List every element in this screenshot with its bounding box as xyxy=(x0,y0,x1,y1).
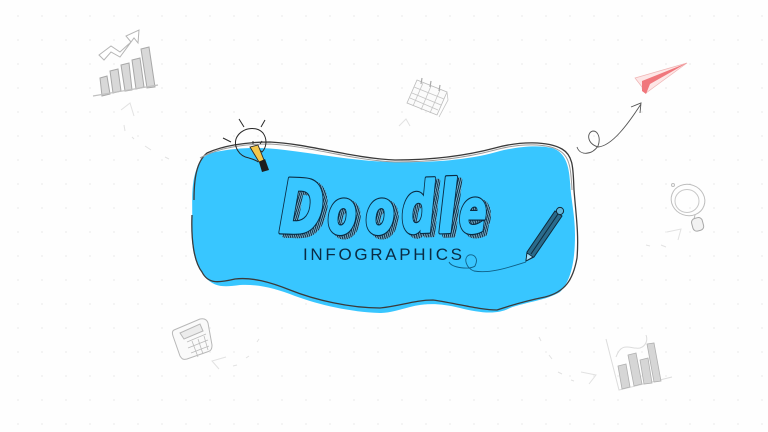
title: Doodle: e xyxy=(463,180,491,250)
subtitle: INFOGRAPHICS: INFOGRAPHICS xyxy=(303,245,462,264)
arrow: curly line to plane xyxy=(577,103,641,153)
icon: calendar xyxy=(407,78,448,117)
title: Doodle: l xyxy=(436,166,459,250)
title: Doodle: o xyxy=(366,179,394,248)
icon: calculator xyxy=(172,319,212,359)
icon: axis bar chart xyxy=(606,335,672,390)
arrow: dashed path to calendar xyxy=(399,119,410,126)
icon: magnifying glass xyxy=(667,180,709,232)
arrow: dashed path to calculator xyxy=(212,339,259,369)
title: Doodle: o xyxy=(370,182,398,251)
title: Doodle xyxy=(278,165,491,255)
title: Doodle: d xyxy=(400,167,438,250)
hand-drawn outline xyxy=(192,142,578,310)
title: Doodle: o xyxy=(366,179,394,248)
title: Doodle: e xyxy=(459,177,487,247)
arrow: dashed path to growth chart xyxy=(121,103,169,159)
title: Doodle: D xyxy=(282,168,329,255)
title: Doodle: o xyxy=(332,182,360,251)
title: Doodle: l xyxy=(436,166,459,250)
title: Doodle: d xyxy=(404,170,442,253)
title: Doodle: l xyxy=(440,169,463,253)
title: Doodle: o xyxy=(328,179,356,248)
title: Doodle: d xyxy=(400,167,438,250)
title: Doodle: e xyxy=(459,177,487,247)
title: Doodle: D xyxy=(278,165,325,252)
icon: paper plane xyxy=(635,63,687,94)
arrow: dashed path to magnifier xyxy=(646,229,681,247)
arrow: dashed path to axis chart xyxy=(539,337,596,384)
title: Doodle: D xyxy=(278,165,325,252)
title: Doodle: o xyxy=(328,179,356,248)
icon: light bulb xyxy=(223,119,269,172)
icon: growth bar chart xyxy=(93,30,158,96)
icon: pencil with scribble xyxy=(449,207,564,272)
blue blob panel xyxy=(192,146,575,313)
